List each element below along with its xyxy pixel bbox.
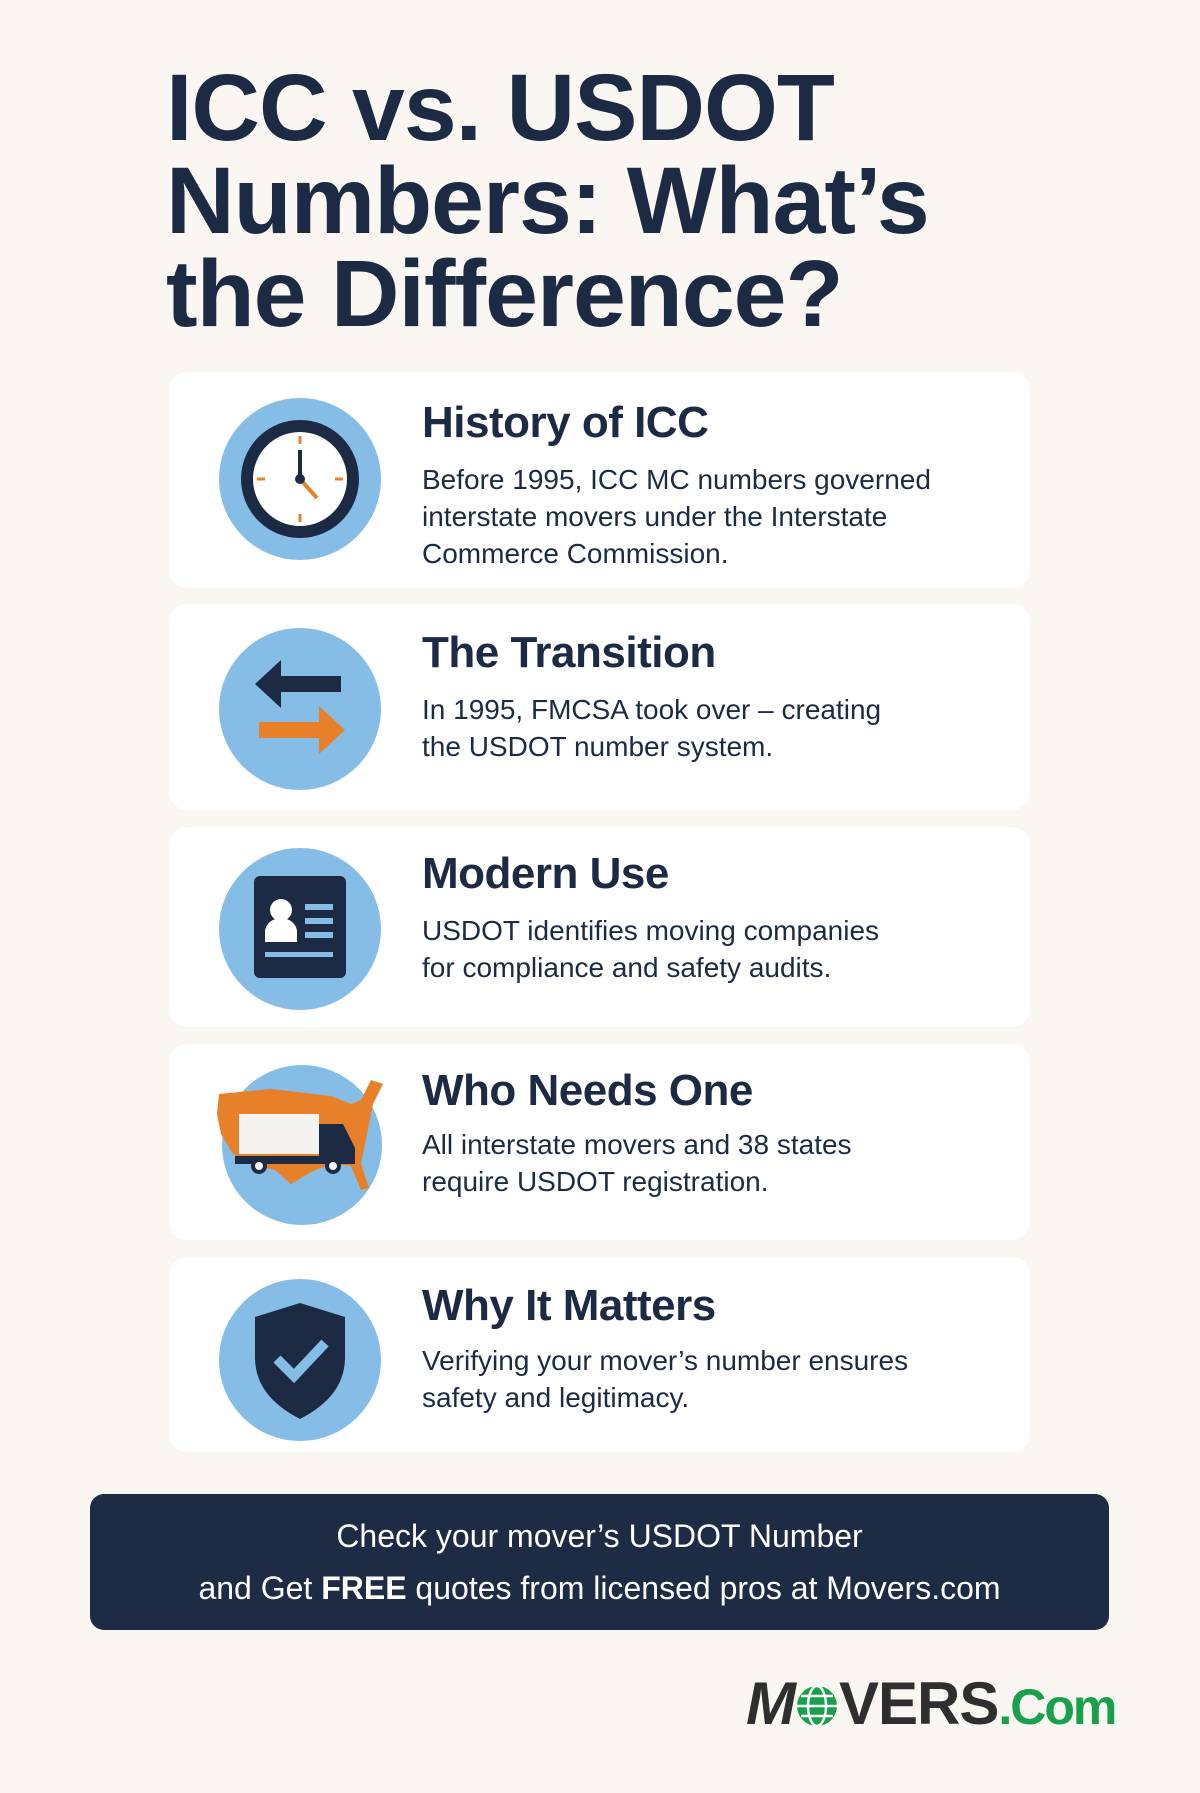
body text: In 1995, FMCSA took over – creating: [422, 694, 881, 725]
panel: who needs one: [169, 1044, 1030, 1240]
title: Numbers: What’s: [166, 148, 929, 254]
body text: [422, 915, 879, 983]
body text: [422, 464, 931, 569]
panel: why it matters: [169, 1257, 1030, 1452]
body text: All interstate movers and 38 states: [422, 1129, 852, 1160]
body text: USDOT identifies moving companies: [422, 915, 879, 946]
body text: interstate movers under the Interstate: [422, 501, 887, 532]
body text: require USDOT registration.: [422, 1166, 768, 1197]
title: [166, 55, 929, 347]
body text: [422, 1129, 852, 1197]
body text: the USDOT number system.: [422, 731, 773, 762]
panel: modern use: [169, 827, 1030, 1027]
heading: Who Needs One: [422, 1066, 753, 1115]
icon: map with truck: [217, 1065, 383, 1225]
panel: history of ICC: [169, 372, 1030, 588]
logo: Movers.com: M VERS.Com: [746, 1670, 1115, 1737]
call to action banner: and Get FREE quotes from licensed pros at Movers.com: [198, 1570, 1001, 1606]
body text: Commerce Commission.: [422, 538, 728, 569]
body text: Verifying your mover’s number ensures: [422, 1345, 908, 1376]
body text: for compliance and safety audits.: [422, 952, 831, 983]
icon: id card: [219, 848, 381, 1010]
heading: The Transition: [422, 628, 716, 677]
panel: the transition: [169, 604, 1030, 810]
body text: [422, 1345, 908, 1413]
call to action banner: [90, 1494, 1109, 1630]
body text: [422, 694, 881, 762]
icon: shield: [219, 1279, 381, 1441]
call to action banner: Check your mover’s USDOT Number: [336, 1518, 863, 1554]
body text: safety and legitimacy.: [422, 1382, 689, 1413]
title: ICC vs. USDOT: [166, 55, 834, 161]
icon: arrows: [219, 628, 381, 790]
heading: Why It Matters: [422, 1281, 716, 1330]
heading: Modern Use: [422, 849, 669, 898]
heading: History of ICC: [422, 398, 708, 447]
body text: Before 1995, ICC MC numbers governed: [422, 464, 931, 495]
title: the Difference?: [166, 241, 843, 347]
icon: clock: [219, 398, 381, 560]
